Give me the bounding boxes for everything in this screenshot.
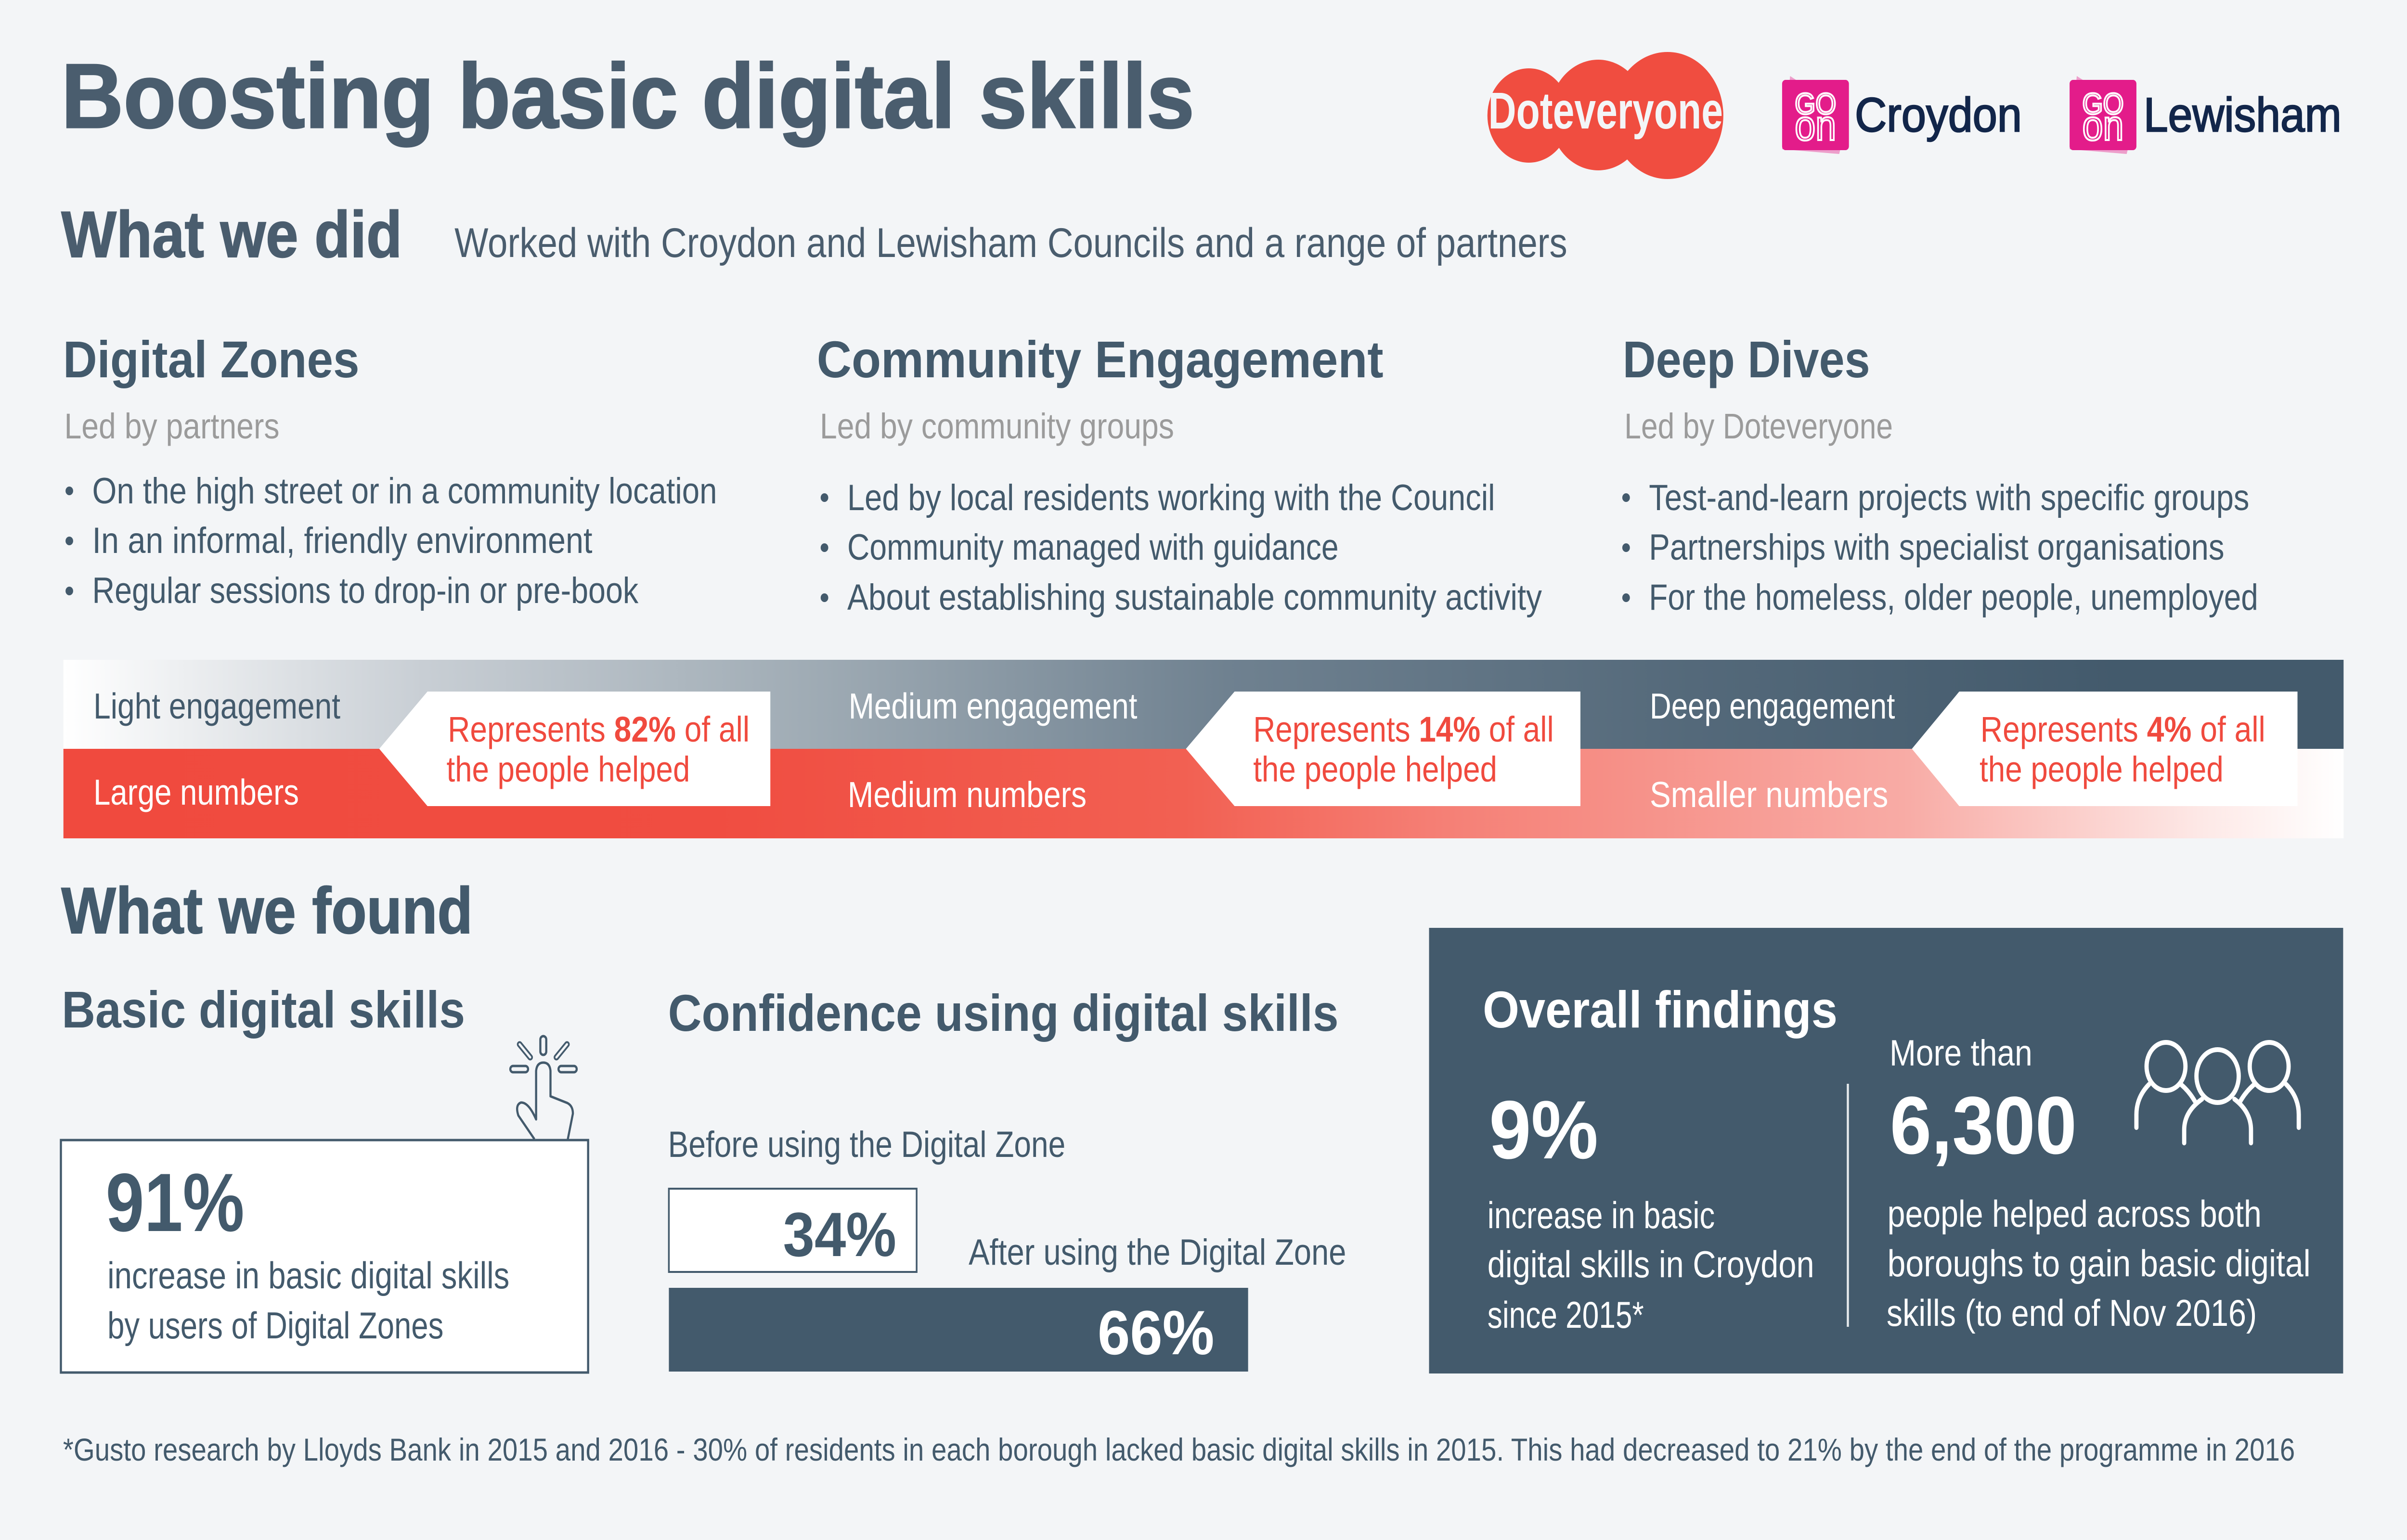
label: smaller numbers: Smaller numbers	[1650, 774, 1888, 815]
bar: 34%	[669, 1189, 917, 1272]
label: deep engagement: Deep engagement	[1650, 686, 1895, 726]
heading: Digital Zones: Digital Zones	[63, 330, 360, 388]
footnote: *Gusto research by Lloyds Bank in 2015 and 2016 - 30% of residents in each borough lacked basic digital skills in 2015. This had decreased to 21% by the end of the programme in 2016	[63, 1433, 2295, 1468]
callout: 14%: Represents 14% of all	[1253, 709, 1554, 749]
stat description: by users of Digital Zones	[107, 1305, 443, 1347]
heading: Confidence using digital skills: Confidence using digital skills	[668, 984, 1339, 1042]
stat description	[107, 1255, 509, 1347]
logo: Go On Lewisham: on	[2082, 102, 2124, 149]
stat description: Croydon: since 2015*	[1488, 1294, 1644, 1336]
bullet list: Regular sessions to drop-in or pre-book	[92, 570, 638, 611]
chart: confidence before and after	[668, 1124, 1346, 1372]
stat number: 9%: 9%	[1489, 1084, 1598, 1176]
bar: 66%: 66%	[1098, 1297, 1214, 1368]
label: after: After using the Digital Zone	[969, 1232, 1346, 1273]
bar: 34%: 34%	[783, 1199, 896, 1270]
logo: Go On Croydon: Croydon	[1855, 88, 2022, 141]
intro text: Worked with Croydon and Lewisham Councils and a range of partners	[454, 220, 1567, 266]
stat description: increase in basic digital skills	[107, 1255, 509, 1296]
stat description: people helped: people helped across both	[1888, 1193, 2262, 1235]
callout: 4%: the people helped	[1980, 749, 2224, 789]
icon: pointing hand	[510, 1036, 577, 1139]
bullet list	[821, 477, 1542, 618]
callout: 4%	[1912, 692, 2298, 806]
subheading: led by partners: Led by partners	[64, 406, 280, 446]
callout: 82%: Represents 82% of all	[448, 709, 750, 749]
heading: overall findings: Overall findings	[1483, 980, 1838, 1039]
icon: people	[2136, 1042, 2299, 1143]
label: light engagement: Light engagement	[93, 686, 340, 726]
logo: Doteveryone	[1488, 52, 1723, 179]
bullet list: On the high street or in a community location	[92, 471, 717, 512]
bullet list: Test-and-learn projects with specific groups	[1649, 477, 2249, 518]
subheading: led by Doteveryone: Led by Doteveryone	[1624, 406, 1893, 446]
stat description: people helped: boroughs to gain basic digital	[1888, 1243, 2311, 1284]
stat description: people helped	[1887, 1193, 2311, 1334]
bullet list: In an informal, friendly environment	[92, 520, 593, 561]
heading: Basic digital skills: Basic digital skills	[62, 980, 465, 1039]
logo: Doteveryone: Doteveryone	[1488, 81, 1723, 140]
stat description: Croydon: increase in basic	[1488, 1194, 1715, 1236]
engagement band	[64, 660, 2343, 838]
label: more than: More than	[1889, 1033, 2032, 1074]
subheading: led by community groups: Led by community groups	[820, 406, 1174, 446]
callout: 14%: the people helped	[1253, 749, 1497, 789]
bullet list: Community managed with guidance	[847, 527, 1339, 568]
stat box: 91%	[61, 1140, 588, 1373]
callout: 82%	[379, 692, 770, 806]
label: medium engagement: Medium engagement	[849, 686, 1138, 726]
label: large numbers: Large numbers	[93, 772, 299, 812]
label: before: Before using the Digital Zone	[668, 1124, 1065, 1165]
logo: Go On Lewisham: GO	[2082, 88, 2124, 121]
logo: Go On Lewisham	[2070, 76, 2342, 154]
bullet list: Led by local residents working with the Council	[847, 477, 1495, 518]
callout: 82%: the people helped	[446, 749, 690, 789]
panel: Digital Zones	[63, 330, 717, 611]
heading: Deep Dives: Deep Dives	[1623, 330, 1870, 388]
logo: Go On Croydon	[1782, 76, 2022, 154]
stat description: Croydon: digital skills in Croydon	[1488, 1244, 1814, 1285]
callout: 4%: Represents 4% of all	[1980, 709, 2265, 749]
stat description: people helped: skills (to end of Nov 2016)	[1887, 1292, 2257, 1334]
heading: What we found: What we found	[61, 874, 473, 948]
bullet list: Partnerships with specialist organisations	[1649, 527, 2225, 568]
logo: Go On Croydon: on	[1795, 102, 1836, 149]
panel: Deep Dives	[1622, 330, 2258, 618]
stat description: Croydon	[1488, 1194, 1814, 1336]
logo: Go On Lewisham: Lewisham	[2144, 88, 2342, 141]
panel: overall findings	[1429, 928, 2343, 1373]
label: medium numbers: Medium numbers	[848, 774, 1087, 815]
logo: Go On Croydon: GO	[1795, 88, 1836, 121]
stat number: 91%: 91%	[106, 1156, 245, 1249]
bullet list: For the homeless, older people, unemployed	[1649, 577, 2258, 618]
bullet list: About establishing sustainable community activity	[847, 577, 1542, 618]
callout: 14%	[1186, 692, 1580, 806]
bar: 66%	[669, 1288, 1248, 1372]
title: Boosting basic digital skills	[61, 45, 1194, 147]
stat number: 6,300: 6,300	[1890, 1079, 2077, 1171]
heading: Community Engagement: Community Engagement	[817, 330, 1384, 388]
panel: Community Engagement	[817, 330, 1542, 618]
heading: What we did: What we did	[61, 198, 402, 271]
bullet list	[1622, 477, 2258, 618]
bullet list	[65, 471, 717, 611]
